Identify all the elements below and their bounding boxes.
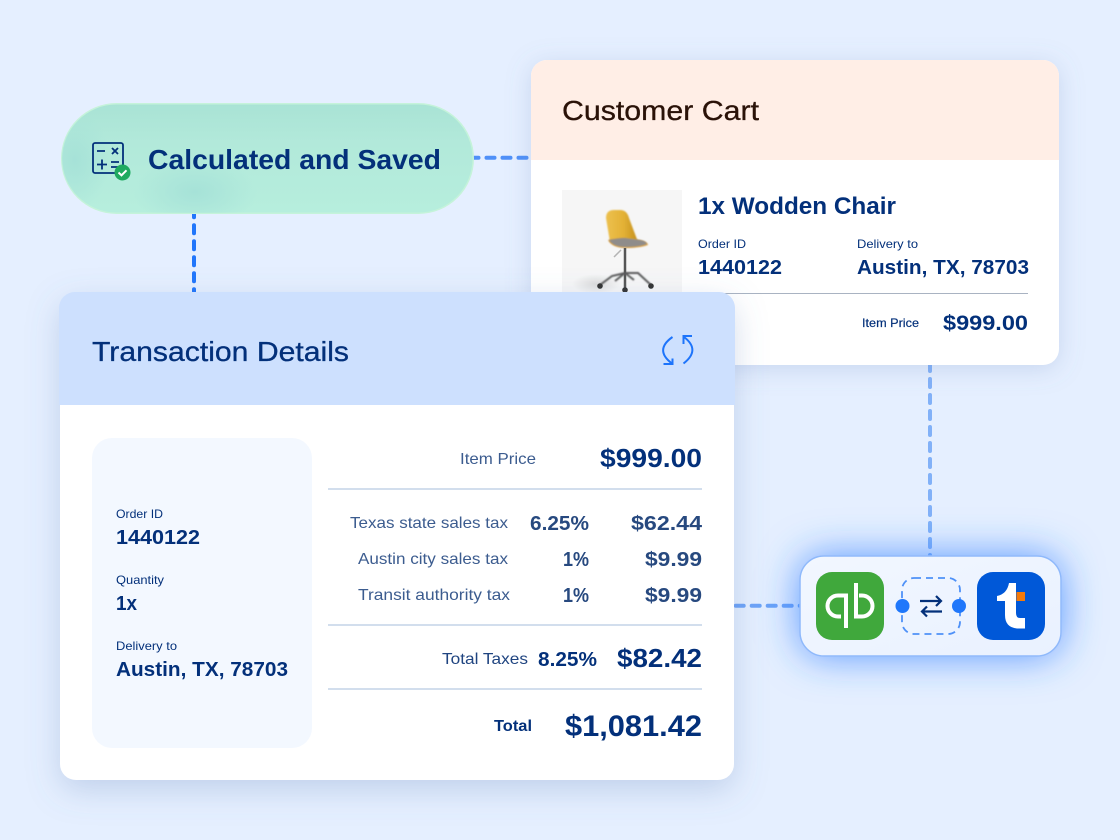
pill label: Calculated and Saved bbox=[148, 144, 441, 175]
price table: Texas state sales tax bbox=[350, 515, 508, 532]
order summary panel: Austin, TX, 78703 bbox=[116, 659, 288, 681]
product details: Austin, TX, 78703 bbox=[857, 257, 1029, 279]
icon: sync connector bbox=[896, 578, 966, 634]
price table: Total Taxes bbox=[442, 651, 528, 668]
product details: $999.00 bbox=[943, 312, 1028, 335]
price table: 1% bbox=[563, 549, 589, 571]
panel: transaction details bbox=[59, 292, 735, 780]
order summary panel: Quantity bbox=[116, 573, 164, 587]
order summary panel: Order ID bbox=[116, 507, 163, 521]
order summary panel: Delivery to bbox=[116, 639, 177, 653]
connector: cart to integration bbox=[928, 363, 932, 560]
icon: quickbooks bbox=[816, 572, 884, 640]
transaction header bbox=[59, 292, 735, 405]
connector: pill to cart bbox=[470, 156, 534, 160]
icon: calculator with check bbox=[93, 143, 130, 180]
product details: Item Price bbox=[862, 316, 919, 330]
price table: Austin city sales tax bbox=[358, 551, 508, 568]
price table: Transit authority tax bbox=[358, 587, 510, 604]
transaction heading: Transaction Details bbox=[92, 336, 349, 367]
price table: $9.99 bbox=[645, 549, 702, 571]
connector: pill to transaction bbox=[192, 209, 196, 296]
price table: $82.42 bbox=[617, 643, 702, 673]
price table: 6.25% bbox=[530, 513, 589, 535]
order summary panel: 1x bbox=[116, 593, 137, 615]
connector: transaction to integration bbox=[736, 604, 802, 608]
cart header bbox=[531, 60, 1059, 160]
product image: chair bbox=[562, 190, 682, 294]
price table: $62.44 bbox=[631, 513, 703, 535]
icon: taxjar t bbox=[977, 572, 1045, 640]
product details bbox=[698, 193, 1029, 335]
panel: integration bbox=[800, 556, 1061, 656]
price table: $1,081.42 bbox=[565, 710, 702, 743]
price table bbox=[328, 443, 703, 743]
product details: 1x Wodden Chair bbox=[698, 193, 896, 220]
icon: refresh bbox=[663, 336, 692, 364]
price table: $999.00 bbox=[600, 443, 702, 473]
pill: calculated and saved bbox=[61, 103, 474, 214]
order summary panel bbox=[92, 438, 312, 748]
product details: Order ID bbox=[698, 237, 746, 251]
price table: 1% bbox=[563, 585, 589, 607]
order summary panel: 1440122 bbox=[116, 527, 200, 549]
price table: 8.25% bbox=[538, 649, 597, 671]
product details: Delivery to bbox=[857, 237, 918, 251]
product details: 1440122 bbox=[698, 257, 782, 279]
price table: Item Price bbox=[460, 451, 536, 468]
cart heading: Customer Cart bbox=[562, 95, 759, 126]
price table: Total bbox=[494, 718, 532, 735]
price table: $9.99 bbox=[645, 585, 702, 607]
panel: customer cart bbox=[531, 60, 1059, 365]
